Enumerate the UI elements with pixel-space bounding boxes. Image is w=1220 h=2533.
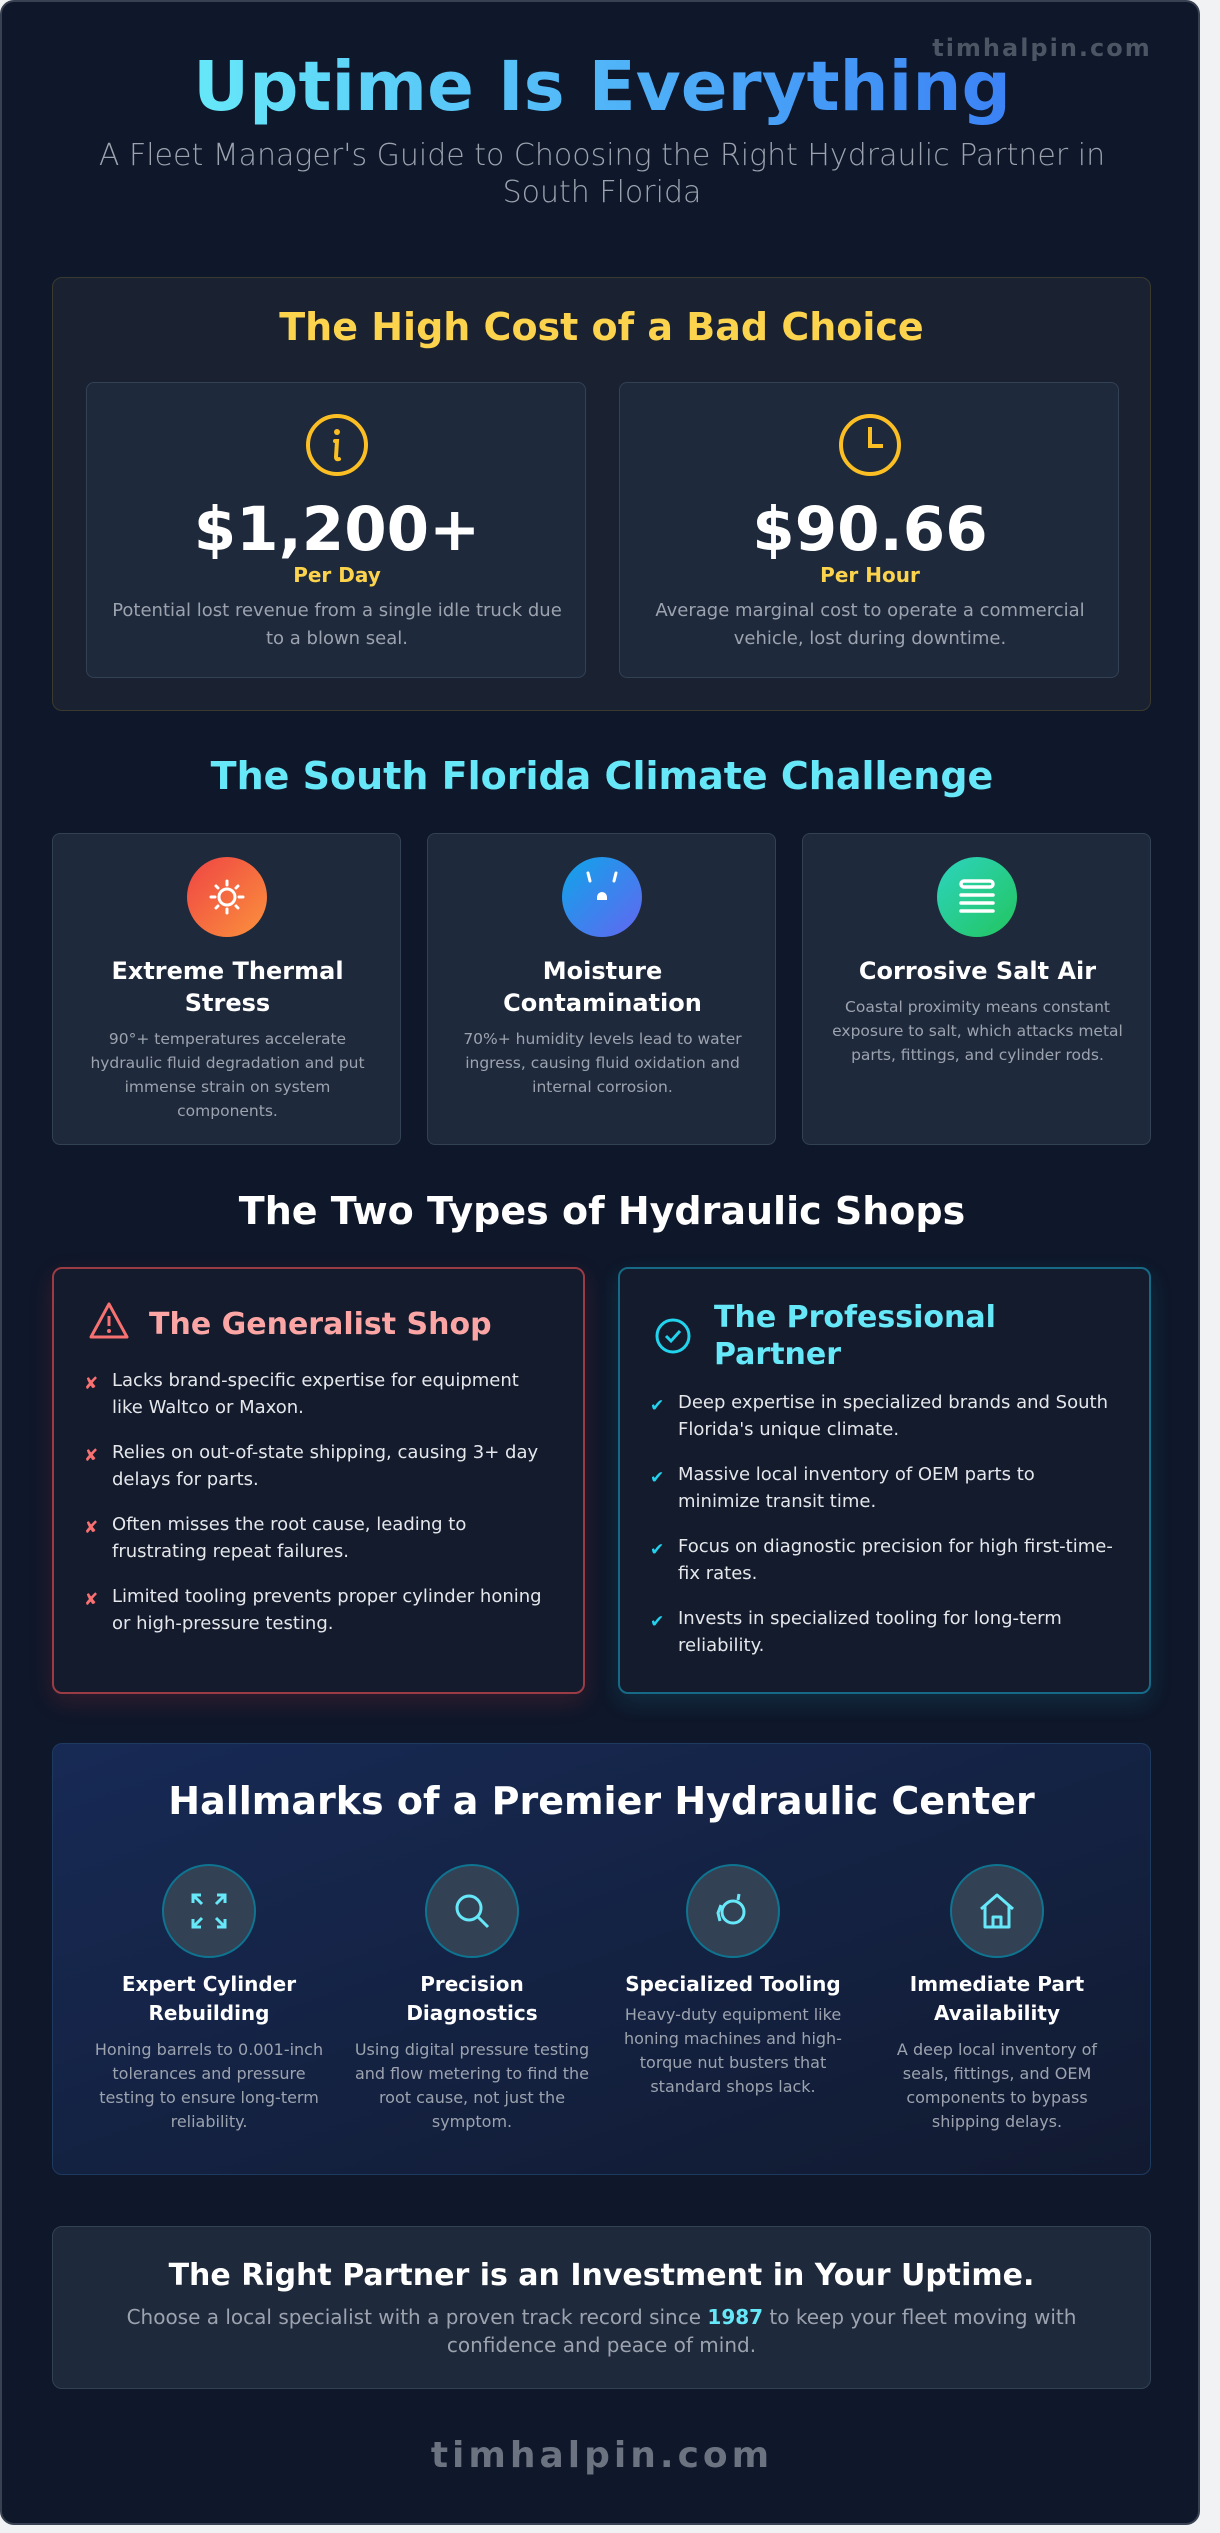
card: per hour: Per Hour: [820, 563, 920, 587]
text: salt: [832, 957, 1123, 1064]
hallmark: diagnostics: Precision Diagnostics: [406, 1972, 538, 2025]
footer watermark: timhalpin.com: [431, 2435, 773, 2476]
card: per hour: [619, 382, 1119, 678]
list: generalist: Often misses the root cause, leading to frustrating repeat failures.: [112, 1514, 466, 1562]
hallmark: diagnostics: [355, 1864, 589, 2131]
list: generalist: Relies on out-of-state shipping, causing 3+ day delays for parts.: [112, 1442, 538, 1490]
heading: professional: The Professional Partner: [714, 1300, 996, 1372]
icon: layers: [937, 857, 1017, 937]
hallmark: cylinder: [95, 1864, 323, 2131]
hallmark: cylinder: Expert Cylinder Rebuilding: [122, 1972, 296, 2025]
hallmark: cylinder: Honing barrels to 0.001-inch tolerances and pressure testing to ensure long-term reliability.: [95, 2040, 323, 2131]
panel: call to action: The Right Partner is an Investment in Your Uptime.: [169, 2258, 1034, 2293]
list: professional: Massive local inventory of OEM parts to minimize transit time.: [678, 1464, 1035, 1512]
watermark top: timhalpin.com: [932, 34, 1152, 62]
subtitle: A Fleet Manager's Guide to Choosing the Right Hydraulic Partner in South Florida: [99, 138, 1105, 210]
icon: sun: [187, 857, 267, 937]
heading: high cost: The High Cost of a Bad Choice: [279, 305, 924, 349]
text: moisture: Moisture Contamination: [503, 957, 702, 1017]
icon: check circle: [656, 1318, 690, 1354]
icon: clock: [839, 414, 901, 476]
heading: climate: The South Florida Climate Challenge: [211, 754, 993, 798]
text: thermal: 90°+ temperatures accelerate hydraulic fluid degradation and put immense strain on system components.: [90, 1030, 365, 1120]
list: generalist: [84, 1370, 542, 1634]
card: thermal: [52, 833, 401, 1145]
list: professional: ✔: [650, 1612, 664, 1632]
heading: two types: The Two Types of Hydraulic Shops: [239, 1189, 965, 1233]
card: salt: [802, 833, 1151, 1145]
text: moisture: 70%+ humidity levels lead to water ingress, causing fluid oxidation and internal corrosion.: [463, 1030, 742, 1096]
list: generalist: ✘: [84, 1590, 98, 1610]
text: thermal: [90, 957, 365, 1120]
title: Uptime Is Everything: [193, 47, 1011, 127]
list: professional: Focus on diagnostic precision for high first-time-fix rates.: [678, 1536, 1113, 1584]
hallmark: tooling: [624, 1864, 842, 2096]
list: professional: ✔: [650, 1396, 664, 1416]
icon: magnifier: [425, 1864, 519, 1958]
text: thermal: Extreme Thermal Stress: [111, 957, 344, 1017]
card: per hour: $90.66: [752, 494, 988, 565]
hallmark: parts: A deep local inventory of seals, fittings, and OEM components to bypass shipping delays.: [897, 2040, 1097, 2131]
card: per day: $1,200+: [194, 494, 480, 565]
list: professional: Deep expertise in specialized brands and South Florida's unique climate.: [678, 1392, 1108, 1440]
text: salt: Corrosive Salt Air: [859, 957, 1096, 985]
icon: house: [950, 1864, 1044, 1958]
hallmark: tooling: Specialized Tooling: [625, 1972, 841, 1996]
panel: call to action: Choose a local specialist with a proven track record since 1987 to keep your fleet moving with confidence and peace of mind.: [127, 2305, 1076, 2357]
card: per day: [86, 382, 586, 678]
list: generalist: ✘: [84, 1374, 98, 1394]
heading: generalist: The Generalist Shop: [149, 1307, 492, 1342]
icon: warning: [90, 1302, 129, 1338]
card: per day: Potential lost revenue from a single idle truck due to a blown seal.: [112, 600, 562, 649]
list: generalist: ✘: [84, 1446, 98, 1466]
list: professional: ✔: [650, 1468, 664, 1488]
icon: drops: [562, 857, 642, 937]
panel: high cost: [52, 277, 1151, 711]
hallmark: parts: Immediate Part Availability: [910, 1972, 1084, 2025]
card: per hour: Average marginal cost to operate a commercial vehicle, lost during downtime.: [655, 600, 1085, 649]
heading: hallmarks: Hallmarks of a Premier Hydraulic Center: [168, 1779, 1035, 1823]
icon: info: [306, 414, 368, 476]
list: professional: ✔: [650, 1540, 664, 1560]
list: professional: [650, 1392, 1113, 1656]
list: generalist: Limited tooling prevents proper cylinder honing or high-pressure testing.: [112, 1586, 542, 1634]
panel: hallmarks: [52, 1743, 1151, 2175]
icon: expand: [162, 1864, 256, 1958]
panel: generalist: [52, 1267, 585, 1694]
card: per day: Per Day: [293, 563, 381, 587]
card: moisture: [427, 833, 776, 1145]
hallmark: tooling: Heavy-duty equipment like honing machines and high-torque nut busters that standard shops lack.: [624, 2005, 842, 2096]
icon: tool: [686, 1864, 780, 1958]
text: moisture: [463, 957, 742, 1096]
panel: professional: [618, 1267, 1151, 1694]
hallmark: parts: [897, 1864, 1098, 2131]
list: generalist: ✘: [84, 1518, 98, 1538]
text: salt: Coastal proximity means constant exposure to salt, which attacks metal parts, fittings, and cylinder rods.: [832, 998, 1123, 1064]
list: professional: Invests in specialized tooling for long-term reliability.: [678, 1608, 1062, 1656]
list: generalist: Lacks brand-specific expertise for equipment like Waltco or Maxon.: [112, 1370, 519, 1418]
hallmark: diagnostics: Using digital pressure testing and flow metering to find the root cause, not just the symptom.: [355, 2040, 589, 2131]
panel: call to action: [52, 2226, 1151, 2389]
